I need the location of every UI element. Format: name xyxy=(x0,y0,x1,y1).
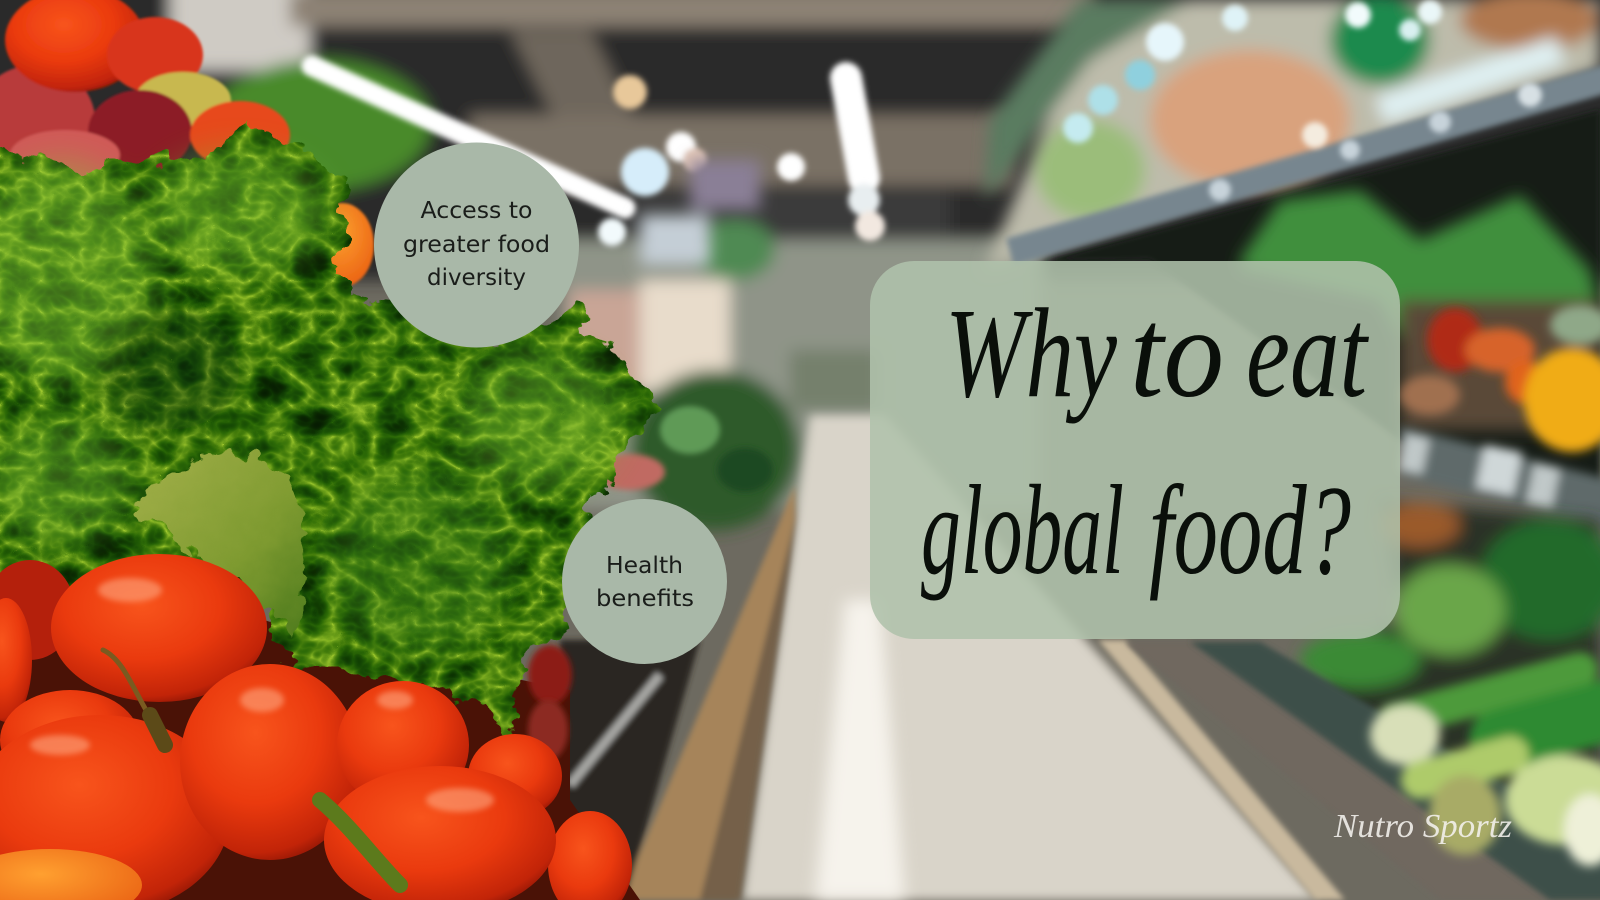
right middle shelf produce xyxy=(1240,190,1600,530)
title: Why to eat global food?: global xyxy=(921,459,1124,601)
title: Why to eat global food?: Why xyxy=(945,282,1117,424)
panel: title background xyxy=(870,261,1400,639)
tomato highlights xyxy=(30,578,494,812)
tomato stems xyxy=(103,650,400,885)
right upper shelf with packaged produce xyxy=(985,0,1600,500)
title: Why to eat global food? xyxy=(921,282,1370,601)
title: Why to eat global food?: food? xyxy=(1149,459,1351,601)
circle callout: Health benefits xyxy=(562,499,727,664)
circle callout: Health benefits: Health xyxy=(606,553,683,579)
pale outer leaf xyxy=(135,452,305,640)
watermark: Nutro Sportz: Nutro Sportz xyxy=(1333,808,1512,845)
right lower shelf greens and cucumbers xyxy=(1125,500,1600,900)
title: Why to eat global food?: to xyxy=(1130,282,1224,424)
wooden shelf edge xyxy=(560,485,795,900)
aisle floor xyxy=(742,415,1345,900)
dark base under produce xyxy=(0,540,640,900)
lettuce head xyxy=(0,125,660,740)
tomatoes and peppers xyxy=(0,554,632,900)
ceiling lights xyxy=(312,66,885,265)
circle callout: Health benefits: benefits xyxy=(596,586,694,612)
circle callout: Access to greater food diversity xyxy=(374,142,579,348)
title: Why to eat global food?: eat xyxy=(1246,282,1370,424)
top left red produce xyxy=(0,0,374,287)
circle callout: Access to greater food diversity: diversity xyxy=(427,265,526,291)
circle callout: Access to greater food diversity: Access to xyxy=(420,198,532,224)
circle callout: Access to greater food diversity: greater food xyxy=(403,232,550,258)
